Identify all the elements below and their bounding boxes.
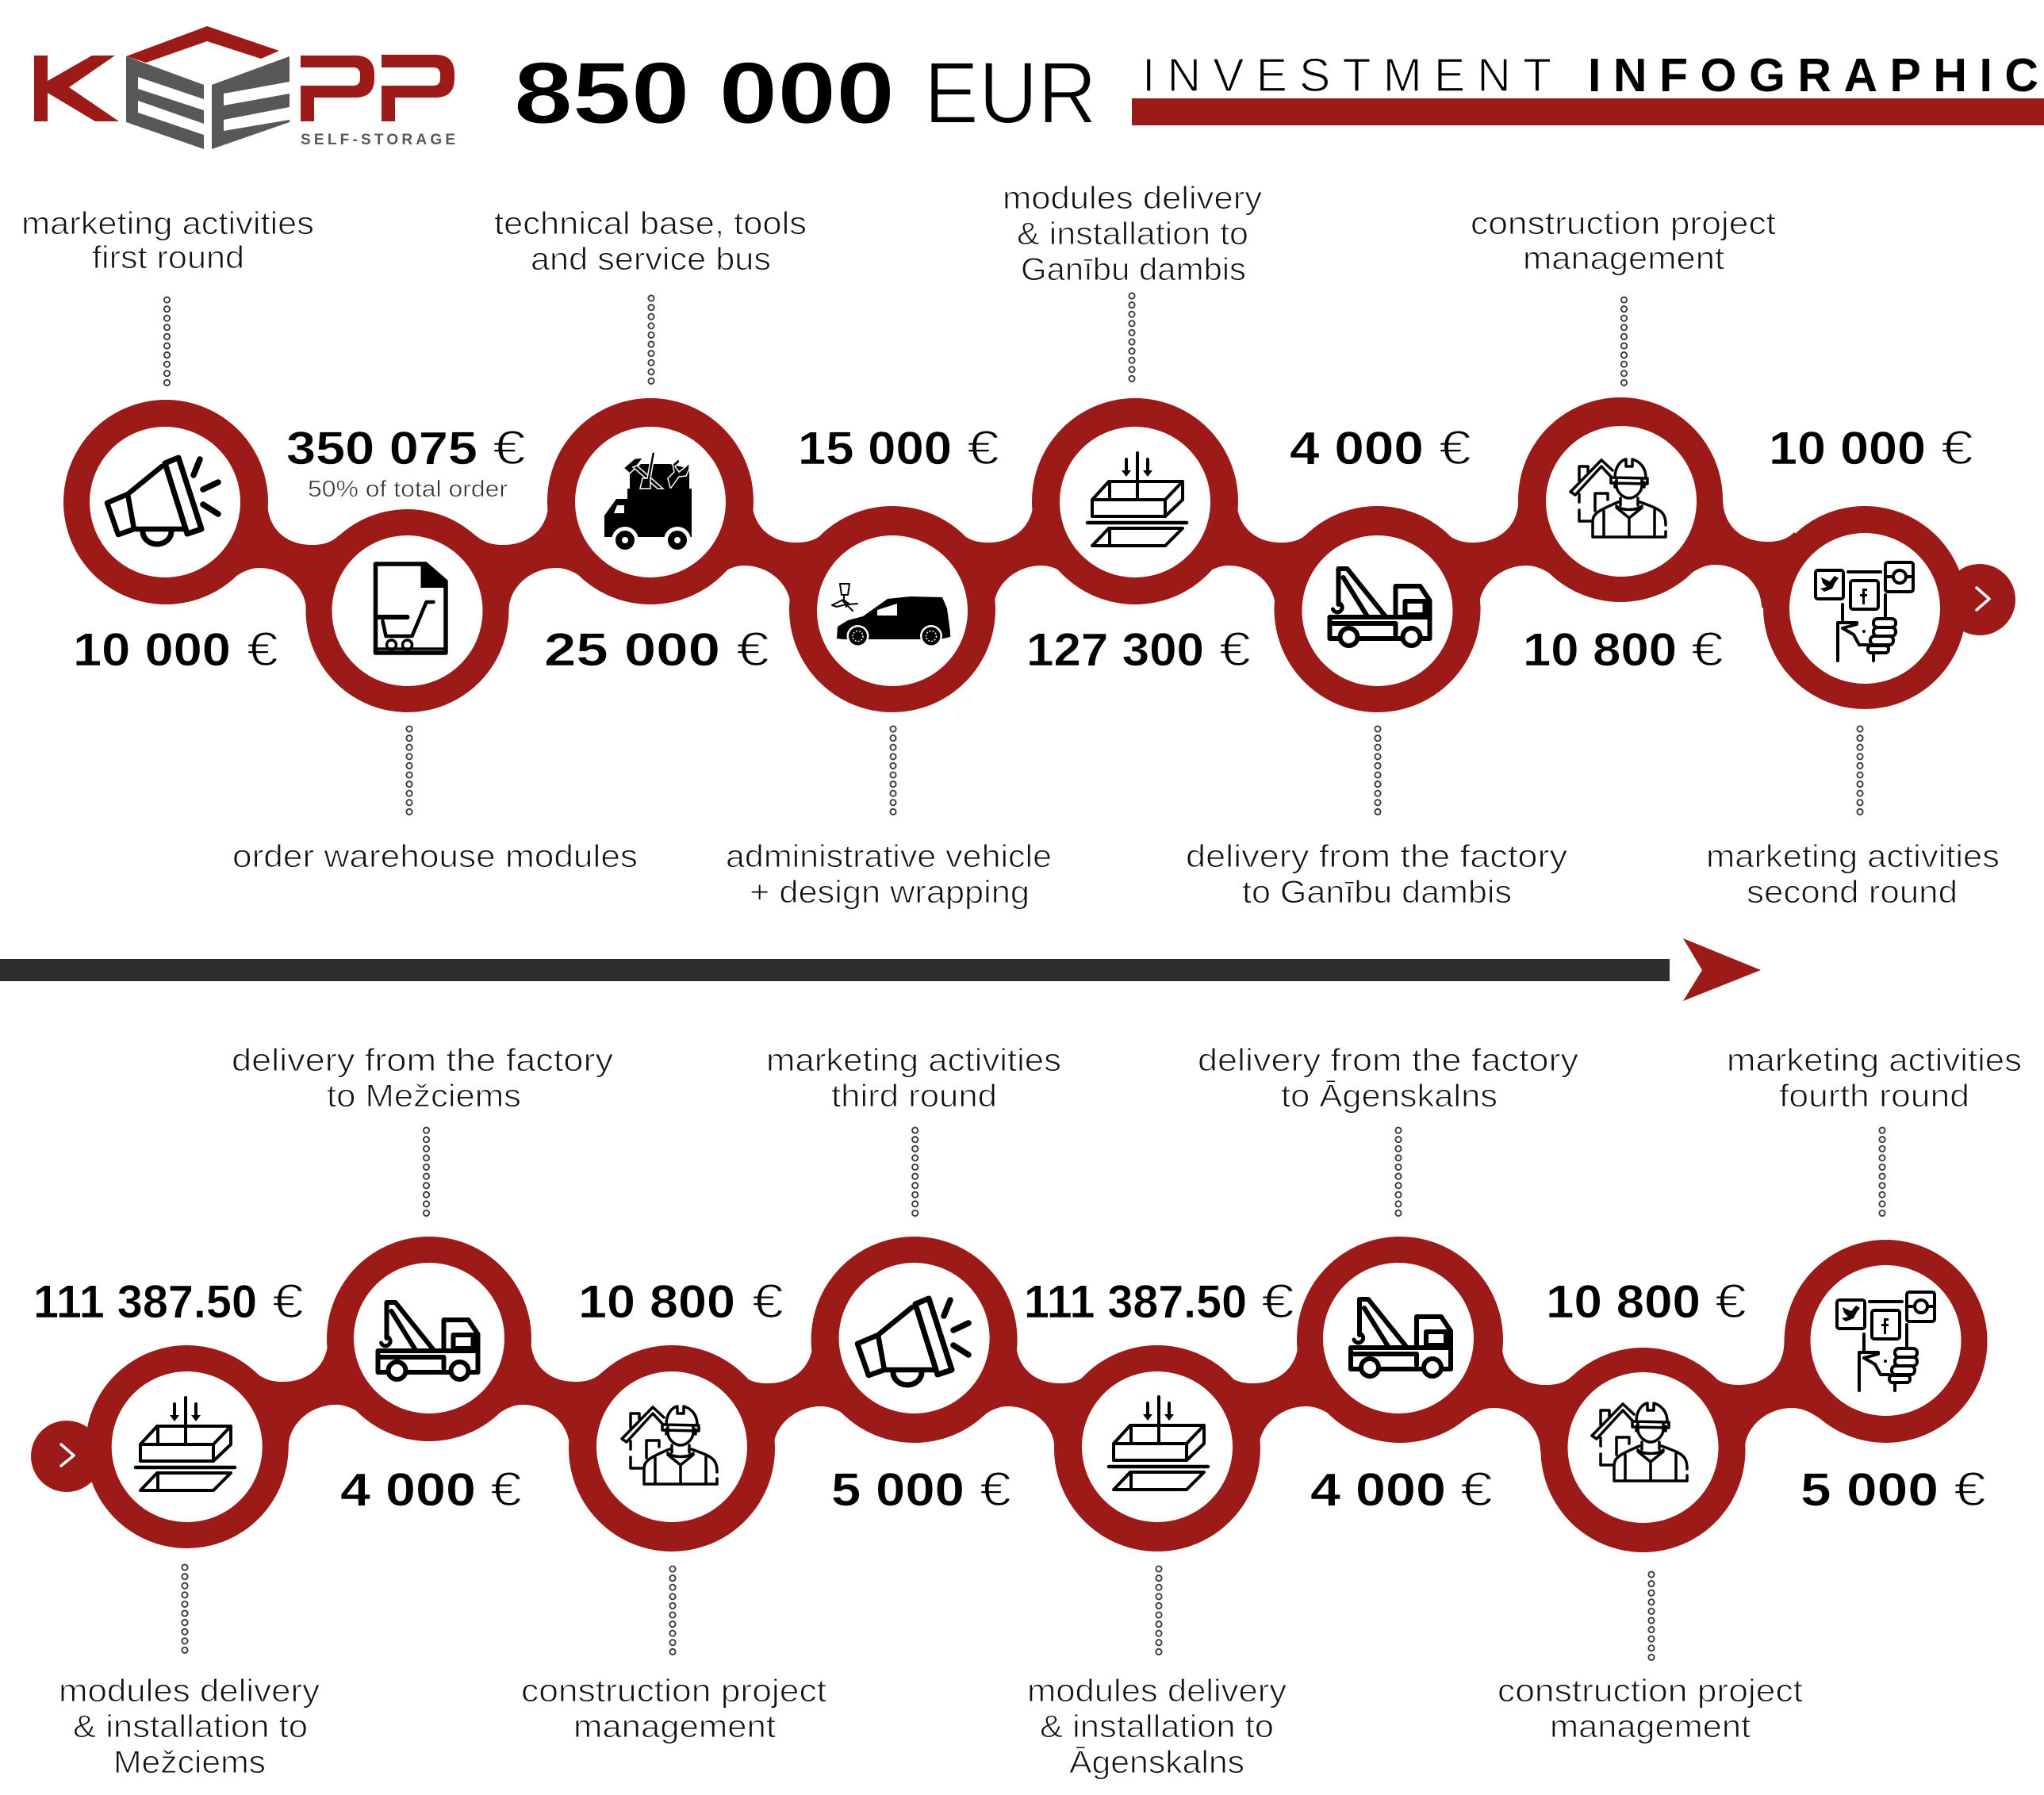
label: marketing activities first round	[21, 206, 314, 275]
amount: 15 000: €	[967, 421, 999, 474]
amount: 10 000	[73, 623, 278, 676]
amount: 4 000 second	[1310, 1463, 1493, 1516]
label: delivery to Ganību dambis: delivery from the factory	[1186, 839, 1567, 874]
amount: 350 075 with note: 350 075	[286, 423, 477, 474]
logo gray box right facet	[212, 56, 290, 149]
heading: investment infographic: INFOGRAPHIC	[1588, 49, 2038, 102]
label: modules delivery to Āgenskalns: & installation to	[1040, 1709, 1274, 1744]
label: modules delivery to Mežciems	[59, 1674, 320, 1780]
label: construction project management: construction project	[1471, 206, 1776, 241]
label: construction project management second	[1498, 1674, 1803, 1744]
amount: 10 000: 10 000	[73, 624, 231, 676]
label: modules delivery to Mežciems: modules delivery	[59, 1674, 320, 1709]
icon: module installation Mežciems	[136, 1398, 235, 1490]
label: technical base: technical base, tools	[494, 206, 807, 241]
amount: 10 000 second: 10 000	[1769, 423, 1926, 474]
icon: megaphone	[107, 458, 218, 544]
label: delivery to Mežciems: delivery from the factory	[232, 1043, 613, 1078]
label: modules delivery to Ganību dambis	[1003, 181, 1262, 287]
label: delivery to Āgenskalns	[1198, 1043, 1578, 1114]
amount: 4 000 second: 4 000	[1310, 1464, 1446, 1516]
label: marketing activities fourth round: fourth round	[1779, 1079, 1969, 1114]
row 1 dotted leader lines	[164, 293, 1863, 815]
label: delivery to Mežciems: to Mežciems	[327, 1079, 521, 1114]
amount: 350 075 with note	[286, 421, 526, 502]
amount: 10 800 second	[1546, 1275, 1747, 1328]
amount: 127 300: 127 300	[1026, 624, 1204, 676]
amount: 5 000 second: €	[1954, 1463, 1986, 1516]
label: delivery to Ganību dambis	[1186, 839, 1567, 910]
label: marketing activities second round: second round	[1747, 875, 1958, 910]
label: marketing activities second round	[1706, 839, 2000, 910]
amount: 5 000: 5 000	[831, 1464, 964, 1516]
label: construction project management: construction project	[521, 1674, 826, 1709]
amount: 111 387.50 second: 111 387.50	[1024, 1276, 1247, 1328]
label: delivery to Āgenskalns: delivery from the factory	[1198, 1043, 1578, 1078]
amount: 4 000: 4 000	[340, 1464, 476, 1516]
title total amount	[514, 44, 1097, 142]
row 2 circle holes	[112, 1263, 1962, 1523]
amount: 4 000: €	[490, 1463, 522, 1516]
logo: KEEPP self-storage	[34, 26, 455, 149]
amount: 4 000: 4 000	[1290, 423, 1424, 474]
label: administrative vehicle: administrative vehicle	[726, 839, 1052, 874]
amount: 25 000: €	[736, 623, 769, 676]
label: construction project management second: construction project	[1498, 1674, 1803, 1709]
logo tagline: SELF-STORAGE	[301, 132, 455, 148]
icon: van with spray gun	[832, 584, 950, 647]
logo letter K	[34, 56, 119, 121]
label: delivery to Mežciems	[232, 1043, 613, 1114]
amount: 5 000 second	[1800, 1463, 1986, 1516]
label: modules delivery to Ganību dambis: & installation to	[1017, 217, 1248, 251]
icon: social media hand	[1816, 562, 1913, 661]
label: construction project management	[1471, 206, 1776, 276]
amount: 25 000	[544, 623, 769, 676]
label: delivery to Ganību dambis: to Ganību dambis	[1242, 875, 1512, 910]
label: modules delivery to Ganību dambis: Ganību dambis	[1021, 252, 1246, 287]
title total amount: EUR	[924, 44, 1097, 142]
heading: investment infographic	[1142, 49, 2038, 102]
divider arrow head	[1683, 938, 1761, 1001]
label: modules delivery to Āgenskalns	[1027, 1674, 1287, 1780]
label: marketing activities third round: marketing activities	[766, 1043, 1061, 1078]
icon: module installation	[1087, 453, 1187, 546]
label: modules delivery to Āgenskalns: Āgenskalns	[1069, 1745, 1244, 1780]
amount: 111 387.50: €	[272, 1275, 304, 1328]
icon: construction worker with house	[1570, 459, 1666, 537]
amount: 15 000: 15 000	[798, 423, 952, 474]
amount: 10 800: €	[1691, 623, 1724, 676]
arrow chevron: row 2 start	[61, 1444, 74, 1466]
amount: 127 300: €	[1219, 623, 1251, 676]
timeline band: row 2	[31, 1237, 1988, 1552]
icon: construction worker second	[1592, 1403, 1687, 1481]
label: modules delivery to Mežciems: Mežciems	[113, 1745, 266, 1780]
icon: tow truck Mežciems	[378, 1302, 477, 1379]
label: construction project management second: management	[1550, 1709, 1751, 1744]
amount: 10 000 second: €	[1941, 421, 1973, 474]
amount: 10 000: €	[247, 623, 278, 676]
amount: 350 075 with note: 50% of total order	[308, 477, 508, 502]
label: marketing activities first round: first round	[92, 240, 244, 275]
icon: construction worker	[622, 1406, 717, 1484]
amount: 25 000: 25 000	[544, 624, 720, 676]
amount: 111 387.50 second: €	[1261, 1275, 1294, 1328]
label: marketing activities third round	[766, 1043, 1061, 1114]
amount: 4 000	[1290, 421, 1471, 474]
amount: 10 800 second: €	[1715, 1275, 1747, 1328]
title total amount: 850 000	[514, 44, 895, 142]
icon: order document with cart	[376, 564, 446, 653]
label: construction project management	[521, 1674, 826, 1744]
row 2 dotted leader lines	[182, 1127, 1885, 1660]
heading red bar	[1132, 98, 2044, 125]
icon: social media hand fourth round	[1837, 1292, 1935, 1390]
logo roof chevron	[126, 26, 279, 63]
logo letters PP	[301, 55, 454, 121]
amount: 10 800: €	[752, 1275, 784, 1328]
label: order warehouse modules: order warehouse modules	[232, 839, 638, 874]
label: marketing activities second round: marketing activities	[1706, 839, 2000, 874]
row 1 circle holes	[90, 426, 1940, 686]
amount: 5 000: €	[980, 1463, 1011, 1516]
amount: 10 800	[1523, 623, 1724, 676]
amount: 5 000 second: 5 000	[1800, 1464, 1939, 1516]
amount: 4 000	[340, 1463, 522, 1516]
amount: 10 800	[578, 1275, 784, 1328]
icon: module installation Āgenskalns	[1109, 1397, 1208, 1490]
label: marketing activities fourth round	[1727, 1043, 2022, 1114]
icon: megaphone third round	[857, 1298, 968, 1385]
logo gray box left facet	[126, 56, 204, 149]
label: technical base	[494, 206, 807, 277]
label: marketing activities third round: third round	[831, 1079, 997, 1114]
icon: tow truck	[1329, 569, 1429, 646]
label: delivery to Āgenskalns: to Āgenskalns	[1281, 1079, 1498, 1114]
divider arrow bar	[0, 959, 1670, 981]
icon: tow truck Āgenskalns	[1351, 1299, 1451, 1376]
label: technical base: and service bus	[531, 242, 771, 277]
icon: service truck with tools	[604, 452, 692, 554]
label: construction project management: management	[1523, 241, 1724, 276]
label: modules delivery to Ganību dambis: modules delivery	[1003, 181, 1262, 216]
amount: 4 000 second: €	[1460, 1463, 1493, 1516]
amount: 350 075 with note: €	[493, 421, 526, 474]
label: marketing activities first round: marketing activities	[21, 206, 314, 241]
amount: 10 800: 10 800	[1523, 624, 1677, 676]
label: marketing activities fourth round: marketing activities	[1727, 1043, 2022, 1078]
label: administrative vehicle	[726, 839, 1052, 910]
label: modules delivery to Āgenskalns: modules delivery	[1027, 1674, 1287, 1709]
amount: 10 800: 10 800	[578, 1276, 735, 1328]
arrow chevron: row 1 end	[1977, 588, 1989, 610]
label: construction project management: management	[573, 1709, 776, 1744]
heading: investment infographic: INVESTMENT	[1142, 49, 1551, 102]
amount: 10 000 second	[1769, 421, 1973, 474]
amount: 15 000	[798, 421, 999, 474]
label: modules delivery to Mežciems: & installation to	[73, 1709, 308, 1744]
timeline band: row 1	[63, 397, 2015, 712]
amount: 4 000: €	[1439, 421, 1471, 474]
amount: 111 387.50: 111 387.50	[33, 1276, 257, 1328]
amount: 10 800 second: 10 800	[1546, 1276, 1701, 1328]
amount: 5 000	[831, 1463, 1011, 1516]
label: administrative vehicle: + design wrapping	[750, 875, 1030, 910]
